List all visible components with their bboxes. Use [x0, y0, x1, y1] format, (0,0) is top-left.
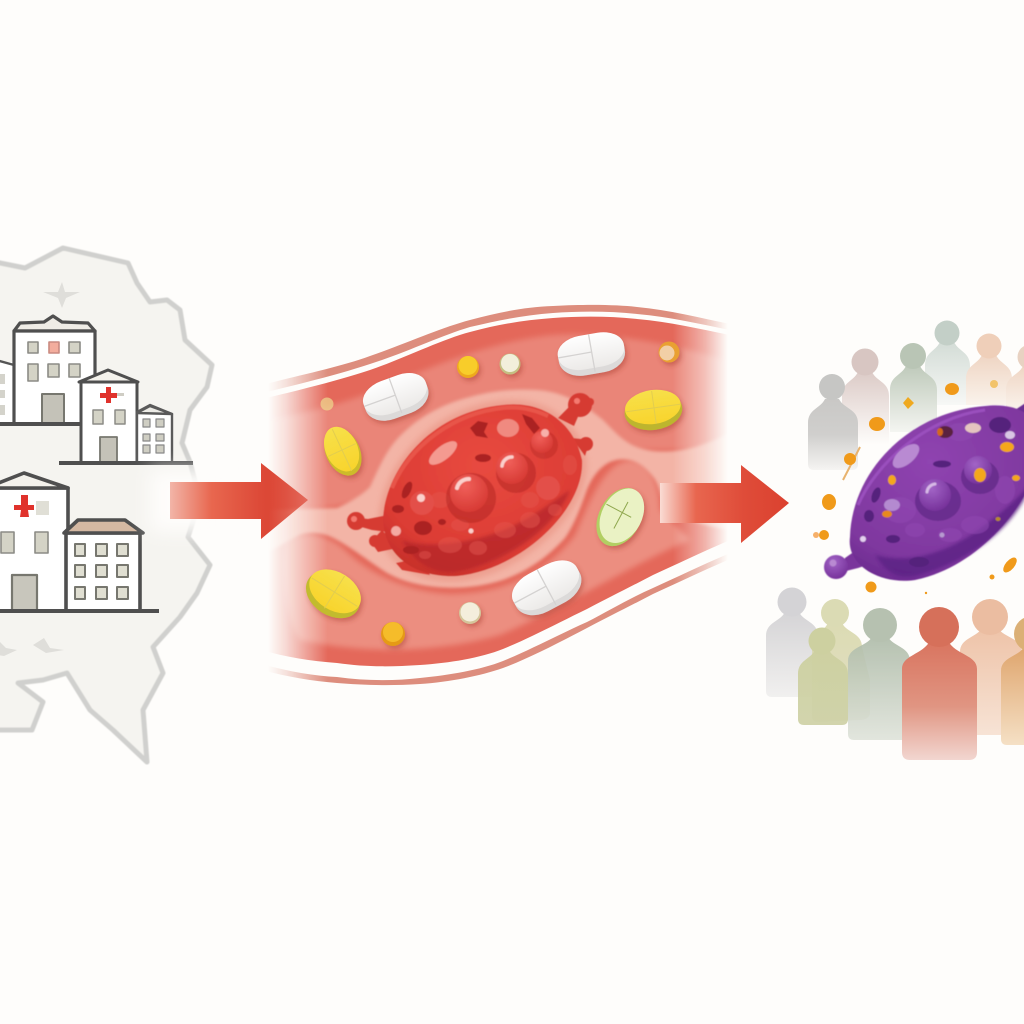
pills: white, yellow and small tablets	[297, 329, 685, 646]
panel: blood vessel with clot and pills	[262, 305, 735, 685]
clot pits	[392, 414, 558, 554]
person front orange	[1001, 616, 1024, 745]
vessel lumen lighter band	[288, 332, 716, 509]
white pill lower	[505, 553, 589, 623]
person back row pink	[842, 348, 889, 445]
pathogen upper rim highlight	[858, 410, 985, 505]
small cream tablet lower	[459, 602, 481, 624]
panel: hospitals in a region	[0, 248, 212, 762]
clot stalk and knob top right	[558, 393, 594, 456]
building: tall hospital	[14, 316, 95, 424]
arrow: bloodstream to community	[660, 465, 789, 543]
pathogen bumps	[884, 423, 1015, 542]
infographic: hospital spread to community	[0, 245, 1024, 765]
yellow pill right	[622, 386, 685, 434]
small orange tablet	[658, 342, 680, 362]
vessel lumen	[262, 317, 730, 666]
clot halo	[378, 400, 587, 582]
purple pathogen	[824, 400, 1024, 581]
panel: community of people	[766, 320, 1024, 760]
white pill upper left	[358, 367, 434, 427]
building: small annex	[137, 405, 172, 463]
arrow glow	[150, 470, 220, 532]
pathogen pits	[864, 417, 1011, 567]
pathogen stalk and knob	[824, 544, 882, 579]
clot dark lower shading	[402, 490, 570, 572]
pathogen lower shading	[875, 480, 1024, 577]
small cream tablet top	[500, 354, 520, 374]
person front peach	[960, 599, 1022, 735]
ground line upper	[0, 422, 82, 426]
clot upper rim highlight	[392, 407, 548, 488]
ground line lower	[0, 609, 159, 613]
person front gray	[766, 588, 818, 697]
person back row gray	[808, 374, 858, 470]
clot pebbles	[419, 455, 577, 559]
building: small left	[0, 360, 14, 424]
person front red	[902, 607, 977, 760]
person back row pale green	[925, 320, 970, 405]
orange particles on pathogen	[882, 428, 1020, 521]
clot stalk and knob left	[347, 512, 430, 575]
pathogen top right nub	[1015, 400, 1024, 420]
clot spheres	[391, 419, 560, 536]
pathogen spheres and highlights	[860, 423, 1015, 542]
person back row peach right	[1006, 344, 1024, 410]
building: large hospital	[0, 473, 68, 611]
person back row peach	[966, 334, 1012, 405]
region map blob	[0, 248, 212, 762]
vessel outer wall top	[262, 305, 730, 393]
vessel outer wall bottom	[262, 553, 730, 685]
yellow pill lower left	[297, 560, 370, 628]
small orange tablet lower	[381, 622, 405, 646]
building: hospital with cross	[79, 370, 138, 463]
person front olive back	[812, 599, 870, 722]
yellow pill left	[316, 421, 369, 482]
pale channel around clot	[262, 390, 735, 588]
ground line middle	[59, 461, 193, 465]
small yellow tablet	[457, 356, 479, 378]
person back row green	[890, 343, 937, 432]
person front olive	[798, 628, 848, 725]
pathogen body	[850, 405, 1024, 581]
faded pale tablet	[320, 398, 334, 410]
orange particles	[813, 380, 1019, 594]
person front sage	[848, 608, 910, 740]
clot body	[383, 404, 582, 576]
white pill upper right	[555, 329, 628, 380]
clot: red blood clot	[347, 393, 594, 582]
map marks	[0, 282, 80, 656]
green pill	[587, 480, 653, 554]
building: large annex	[64, 520, 143, 611]
arrow: hospitals to bloodstream	[170, 463, 308, 539]
lower lumen lighter patch	[283, 460, 690, 650]
